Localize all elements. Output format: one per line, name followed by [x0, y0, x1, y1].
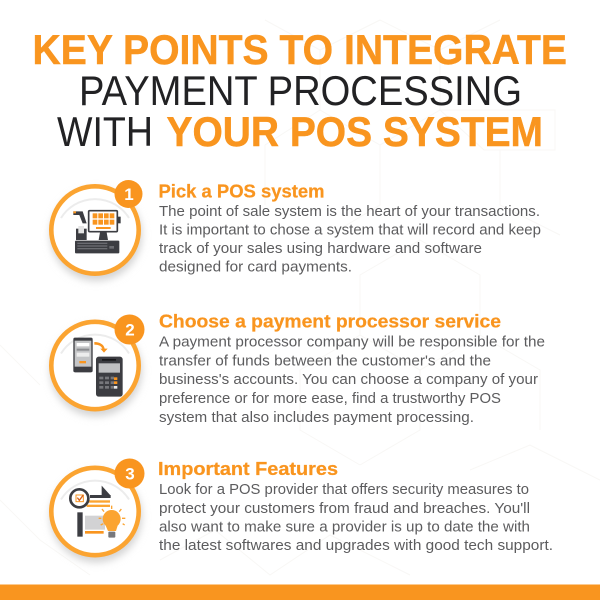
body text: protect your customers from fraud and breaches. You'll — [159, 501, 530, 517]
body text: preference or for more ease, find a trustworthy POS — [159, 391, 501, 407]
heading: Important Features — [158, 459, 338, 479]
title line 3 start: WITH — [57, 108, 153, 155]
title — [32, 26, 567, 155]
body text: also want to make sure a provider is up to date the with — [159, 520, 530, 536]
body text: designed for card payments. — [159, 260, 352, 276]
icon: phone to card terminal in ring: 2 — [125, 320, 135, 340]
icon: POS terminal in ring — [50, 180, 142, 281]
body text: It is important to chose a system that will record and keep — [159, 222, 541, 238]
body text — [159, 334, 545, 426]
body text: A payment processor company will be responsible for the — [159, 334, 545, 350]
heading: Choose a payment processor service — [159, 312, 501, 332]
body text — [159, 204, 541, 276]
panel: step 1 — [50, 180, 541, 281]
icon: magnifier, checklist and light bulb in ring — [50, 458, 144, 562]
icon: phone to card terminal in ring — [50, 314, 144, 416]
icon: magnifier, checklist and light bulb in ring: 3 — [125, 464, 135, 484]
body text: system that also includes payment processing. — [159, 410, 474, 426]
title line 1: KEY POINTS TO INTEGRATE — [32, 26, 567, 73]
body text — [159, 482, 553, 554]
title line 2: PAYMENT PROCESSING — [79, 67, 522, 114]
icon: POS terminal in ring: 1 — [124, 185, 134, 204]
body text: business's accounts. You can choose a company of your — [159, 372, 538, 388]
title line 3 highlight: YOUR POS SYSTEM — [166, 108, 543, 155]
panel: step 2 — [50, 312, 545, 426]
heading: Pick a POS system — [158, 182, 324, 202]
body text: The point of sale system is the heart of your transactions. — [159, 204, 540, 220]
footer bar — [0, 584, 600, 600]
panel: step 3 — [50, 458, 553, 562]
body text: track of your sales using hardware and software — [159, 241, 482, 257]
body text: transfer of funds between the customer's and the — [159, 353, 491, 369]
body text: the latest softwares and upgrades with good tech support. — [159, 538, 553, 554]
body text: Look for a POS provider that offers security measures to — [159, 482, 529, 498]
